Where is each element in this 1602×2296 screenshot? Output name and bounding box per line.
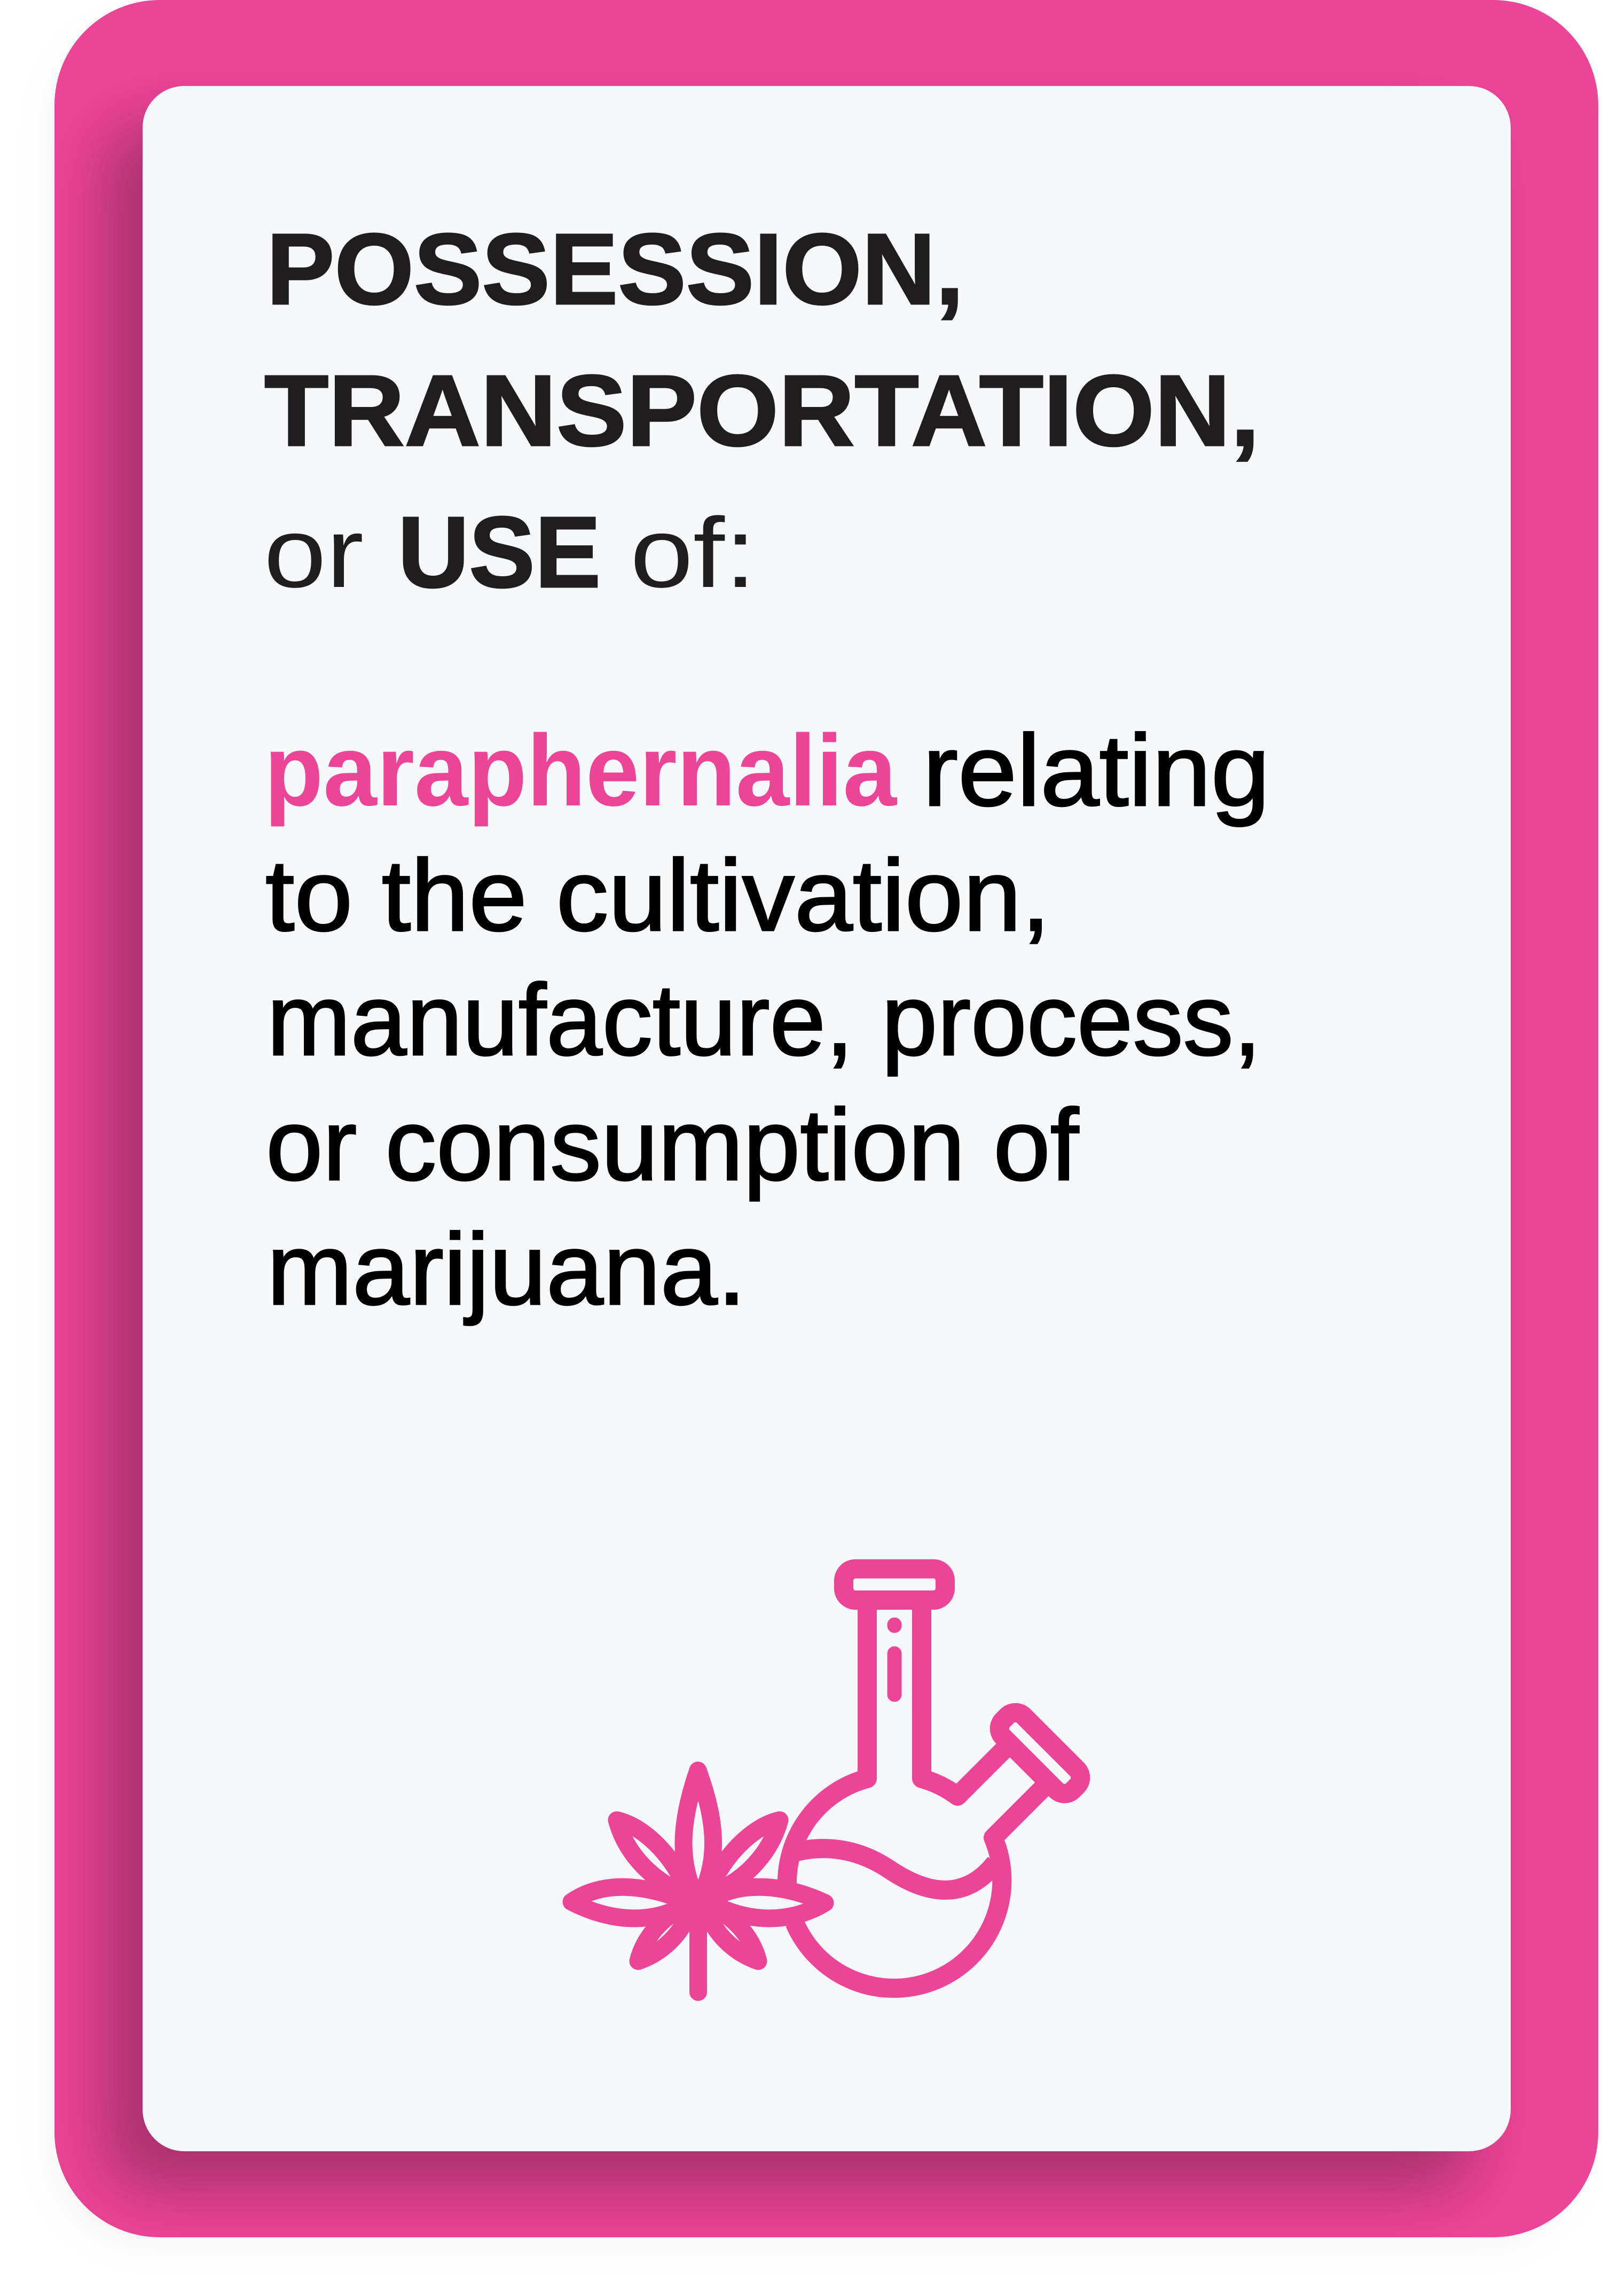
icon part: cannabis leaf <box>571 1770 825 1992</box>
panel: inner card <box>143 86 1511 2151</box>
heading: possession, transportation, or use of: TRANSPORTATION, <box>264 355 1260 467</box>
icon: bong and cannabis leaf <box>571 1569 1085 1992</box>
heading: possession, transportation, or use of: of: <box>630 498 756 608</box>
text block: paraphernalia description: to the cultivation, <box>265 839 1050 952</box>
text block: paraphernalia description: paraphernalia <box>264 714 897 827</box>
text block: paraphernalia description: marijuana. <box>267 1213 746 1326</box>
heading: possession, transportation, or use of: or <box>264 498 364 608</box>
heading: possession, transportation, or use of: POSSESSION, <box>266 213 964 326</box>
text block: paraphernalia description <box>264 714 1270 1326</box>
heading: possession, transportation, or use of: USE <box>398 496 601 609</box>
text block: paraphernalia description: relating <box>923 714 1270 827</box>
icon part: bong <box>787 1569 1085 1988</box>
text block: paraphernalia description: or consumption of <box>266 1088 1079 1202</box>
heading: possession, transportation, or use of <box>264 213 1260 609</box>
text block: paraphernalia description: manufacture, process, <box>267 963 1261 1077</box>
